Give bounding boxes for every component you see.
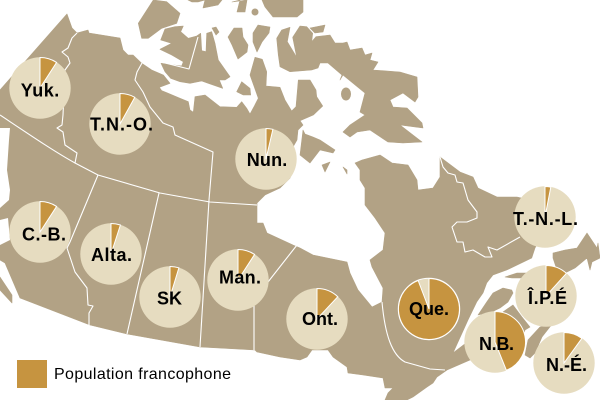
pie: Nouveau-Brunswick: N.B.	[479, 334, 514, 354]
pie: Québec: Que.	[409, 299, 449, 319]
BC / Alberta boundary	[67, 175, 98, 325]
Vancouver Island	[0, 277, 12, 303]
pie: Nouveau-Brunswick	[464, 311, 526, 373]
Quebec / Labrador boundary	[440, 157, 520, 257]
Nova Scotia	[525, 323, 553, 358]
Manitoba / Ontario boundary	[254, 245, 297, 350]
pie: Terre-Neuve-et-Labrador: T.-N.-L.	[513, 209, 578, 229]
pie: Yukon	[9, 57, 71, 119]
small Hudson Bay islands	[322, 162, 347, 174]
High Arctic islands	[188, 0, 325, 35]
pie: Île-du-Prince-Édouard	[515, 265, 577, 327]
pie: Colombie-Britannique	[9, 201, 71, 263]
Alberta / Saskatchewan boundary	[127, 193, 159, 334]
pie: Territoires du Nord-Ouest	[89, 93, 153, 155]
pie: Québec	[398, 278, 460, 340]
Newfoundland	[553, 233, 600, 273]
pie: Territoires du Nord-Ouest: T.N.-O.	[90, 115, 153, 135]
Victoria Island boundary	[161, 37, 198, 69]
Anticosti	[505, 273, 532, 278]
Banks Island	[138, 0, 180, 38]
King William Island	[237, 82, 251, 95]
Ontario / Quebec boundary	[382, 302, 445, 370]
Baffin Island	[277, 26, 423, 143]
pie: Alberta: Alta.	[91, 245, 132, 265]
Yukon / NWT boundary	[57, 33, 77, 163]
legend: Population francophone	[54, 366, 231, 383]
white inlets on the Pacific coast	[0, 128, 10, 245]
Victoria Island	[160, 26, 230, 88]
pie: Nunavut: Nun.	[247, 150, 287, 170]
New Brunswick east	[495, 305, 530, 360]
pie: Ontario	[286, 288, 348, 350]
pie: Colombie-Britannique: C.-B.	[22, 225, 66, 245]
Southampton Island	[300, 130, 335, 163]
Prince of Wales and Somerset Islands	[228, 25, 270, 59]
60th parallel	[0, 115, 257, 205]
pie: Nouvelle-Écosse: N.-É.	[546, 354, 587, 375]
pie: Alberta	[80, 223, 142, 285]
Gaspé peninsula	[478, 288, 513, 315]
pie: Saskatchewan: SK	[157, 288, 182, 308]
pie: Terre-Neuve-et-Labrador	[513, 186, 578, 248]
pie: Île-du-Prince-Édouard: Î.P.É	[527, 287, 567, 308]
pie: Nunavut	[235, 128, 297, 190]
pie: Saskatchewan	[139, 266, 201, 328]
pie: Ontario: Ont.	[302, 309, 338, 329]
legend	[17, 360, 231, 388]
pie: Nouvelle-Écosse	[533, 332, 595, 394]
Saskatchewan / Manitoba boundary	[200, 200, 209, 347]
pie: Yukon: Yuk.	[21, 81, 59, 101]
pie: Manitoba	[207, 249, 269, 311]
pie: Manitoba: Man.	[219, 267, 261, 287]
provincial boundaries	[0, 33, 520, 370]
NWT / Nunavut boundary	[135, 63, 213, 200]
